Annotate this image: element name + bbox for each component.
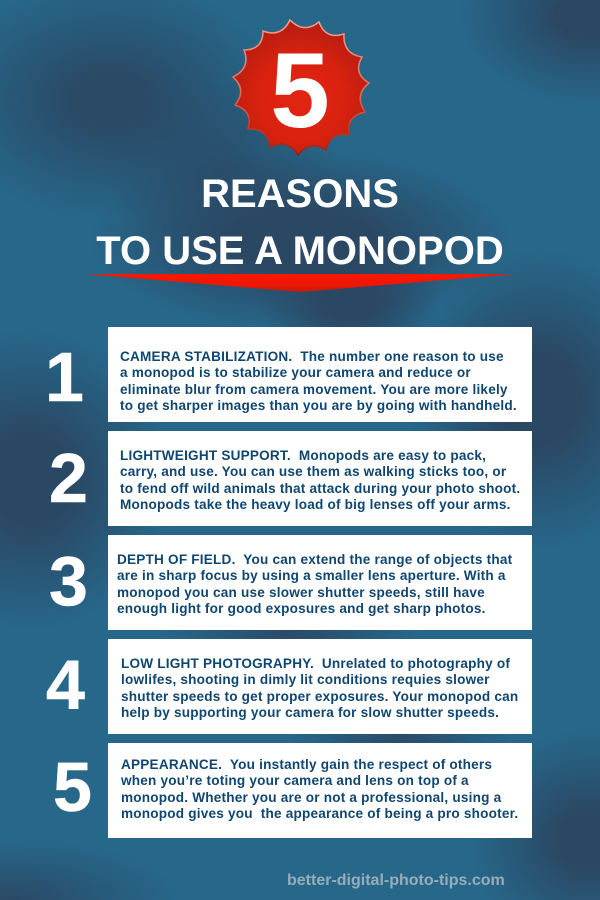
title — [96, 172, 504, 273]
title: TO USE A MONOPOD — [96, 229, 504, 273]
card 2: lightweight support — [108, 431, 532, 526]
badge: red starburst with number 5: 5 — [270, 30, 330, 150]
number 1: 1 — [45, 338, 84, 416]
footer website credit: better-digital-photo-tips.com — [287, 872, 505, 889]
card 2: lightweight support: LIGHTWEIGHT SUPPORT. Monopods are easy to pack, carry, and use. You can use them as walking sticks too, or to fend off wild animals that attack during your photo shoot. Monopods take the heavy load of big lenses off your arms. — [120, 448, 520, 512]
card 1: camera stabilization: CAMERA STABILIZATION. The number one reason to use a monopod is to stabilize your camera and reduce or eliminate blur from camera movement. You are more likely to get sharper images than you are by going with handheld. — [120, 348, 517, 413]
card 4: low light photography: LOW LIGHT PHOTOGRAPHY. Unrelated to photography of lowlifes, shooting in dimly lit conditions requies slower shutter speeds to get proper exposures. Your monopod can help by supporting your camera for slow shutter speeds. — [121, 656, 518, 720]
card 3: depth of field: DEPTH OF FIELD. You can extend the range of objects that are in sharp focus by using a smaller lens aperture. With a monopod you can use slower shutter speeds, still have enough light for good exposures and get sharp photos. — [117, 552, 512, 616]
card 1: camera stabilization — [108, 327, 532, 422]
title: REASONS — [201, 172, 399, 216]
card 4: low light photography — [108, 639, 532, 734]
number 2: 2 — [49, 439, 88, 517]
badge: red starburst with number 5 — [232, 18, 370, 156]
card 3: depth of field — [108, 535, 532, 630]
card 5: appearance: APPEARANCE. You instantly gain the respect of others when you’re toting your camera and lens on top of a monopod. Whether you are or not a professional, using a monopod gives you the appearance of being a pro shooter. — [121, 756, 518, 821]
card 5: appearance — [108, 743, 532, 838]
red arrow divider — [86, 274, 514, 292]
number 3: 3 — [49, 542, 88, 620]
number 4: 4 — [46, 646, 85, 724]
number 5: 5 — [53, 748, 92, 826]
